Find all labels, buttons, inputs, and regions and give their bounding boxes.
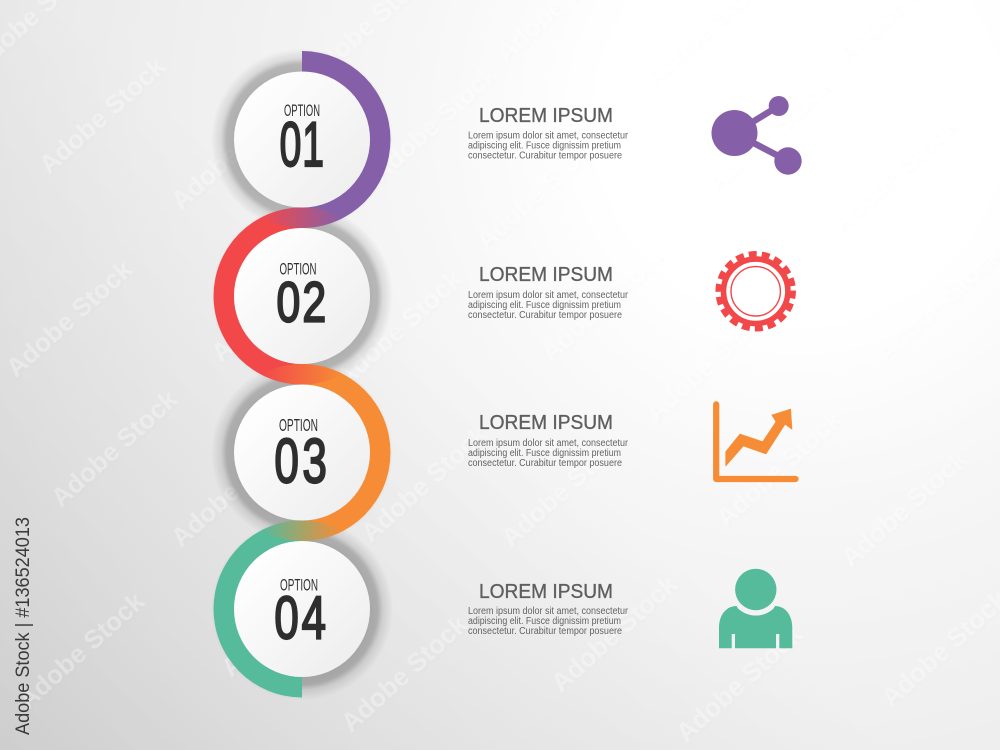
text block 2: consectetur. Curabitur tempor posuere [468,310,622,321]
watermark pattern: Adobe Stock [710,404,848,533]
icon: growth chart [716,404,796,479]
icon: gear [717,253,794,330]
ring: option 03 orange [302,364,390,541]
watermark pattern: Adobe Stock [365,59,503,188]
icon: share network [712,96,802,175]
badge: option 01: OPTION [284,102,320,120]
watermark pattern: Adobe Stock [470,127,608,256]
text block 1: consectetur. Curabitur tempor posuere [468,150,622,162]
badge: option 02 [234,228,370,364]
ring: option 04 green [214,520,302,698]
watermark pattern: Adobe Stock [355,419,493,548]
watermark pattern: Adobe Stock [12,586,150,715]
watermark pattern: Adobe Stock [165,87,303,216]
watermark pattern: Adobe Stock [0,254,138,383]
ring overlap: green to orange [261,521,343,541]
badge: option 04: 04 [274,585,326,652]
text block 2: LOREM IPSUM [479,264,613,286]
circle drop shadows [211,48,393,700]
badge: option 01: 01 [280,111,324,180]
watermark pattern: Adobe Stock [700,69,838,198]
text block 1 [468,105,629,162]
ring overlap: purple to red [261,208,343,228]
watermark pattern: Adobe Stock [215,554,353,683]
text block 2 [468,264,629,321]
text block 2: adipiscing elit. Fusce dignissim pretium [468,300,621,311]
watermark pattern: Adobe Stock [165,424,303,553]
text block 3: Lorem ipsum dolor sit amet, consectetur [468,438,629,449]
watermark pattern: Adobe Stock [495,424,633,553]
badge: option 01 [234,72,370,208]
icon: person [719,569,792,648]
watermark pattern: Adobe Stock [335,609,473,738]
text block 1: adipiscing elit. Fusce dignissim pretium [468,140,621,152]
text block 4: LOREM IPSUM [479,581,613,603]
text block 3 [468,412,629,469]
watermark pattern: Adobe Stock [835,444,973,573]
watermark pattern: Adobe Stock [205,239,343,368]
text block 3: consectetur. Curabitur tempor posuere [468,458,622,469]
stock id caption: Adobe Stock | #136524013 [13,517,34,735]
text block 3: adipiscing elit. Fusce dignissim pretium [468,448,621,459]
badge: option 03: OPTION [279,415,318,435]
watermark pattern: Adobe Stock [825,109,963,238]
badge: option 04 [234,541,370,677]
watermark pattern: Adobe Stock [330,264,468,393]
badge: option 04: OPTION [280,576,318,594]
text block 1: Lorem ipsum dolor sit amet, consectetur [468,130,629,142]
ring overlap: red to orange [261,364,343,384]
watermark pattern: Adobe Stock [535,239,673,368]
text block 4 [468,581,629,637]
watermark pattern: Adobe Stock [670,619,808,748]
text block 4: consectetur. Curabitur tempor posuere [468,626,622,637]
text block 3: LOREM IPSUM [479,412,613,434]
watermark pattern: Adobe Stock [33,51,171,180]
watermark pattern: Adobe Stock [545,569,683,698]
badge: option 02: OPTION [280,260,316,278]
badge: option 02: 02 [276,269,326,334]
badge: option 03: 03 [274,426,327,496]
text block 4: Lorem ipsum dolor sit amet, consectetur [468,606,629,617]
text block 1: LOREM IPSUM [479,105,613,127]
watermark pattern: Adobe Stock [640,299,778,428]
text block 2: Lorem ipsum dolor sit amet, consectetur [468,290,629,301]
text block 4: adipiscing elit. Fusce dignissim pretium [468,616,621,627]
badge: option 03 [234,384,370,520]
ring: option 02 red [214,208,302,384]
ring: option 01 purple [302,51,390,228]
watermark pattern: Adobe Stock [45,384,183,513]
